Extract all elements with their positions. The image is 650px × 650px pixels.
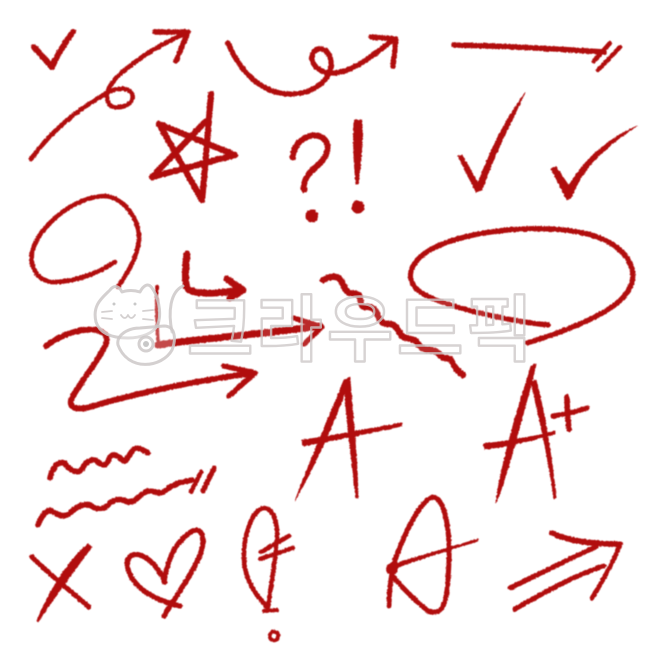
logo text: crowdpic: 크 bbox=[187, 291, 253, 371]
logo text: crowdpic: 픽 bbox=[466, 291, 532, 371]
arrow: smile curve with loop bbox=[228, 37, 396, 94]
icon: question mark bbox=[293, 135, 328, 222]
icon: leaf-shaped exclamation bbox=[244, 508, 293, 640]
icon: exclamation mark bbox=[352, 120, 364, 214]
line: short wave bbox=[50, 448, 148, 478]
arrow: Z-shaped arrow bbox=[46, 330, 255, 409]
shape: open circle left bbox=[32, 196, 139, 287]
letter mark: round A bbox=[386, 497, 478, 612]
watermark: crowdpic logo bbox=[95, 285, 532, 371]
icon: large check mark bbox=[458, 93, 525, 192]
icon: cat mascot with camera bbox=[95, 285, 183, 364]
icon: X mark bbox=[32, 544, 92, 622]
logo text: crowdpic: 우 bbox=[327, 291, 393, 371]
letter mark: A bbox=[295, 377, 402, 501]
line: zigzag wiggle bbox=[323, 277, 463, 375]
shape: speech ellipse bbox=[410, 229, 633, 343]
line: long wave with ticks bbox=[38, 468, 214, 525]
arrow: short bent arrow bbox=[186, 254, 243, 298]
icon: hand-drawn star bbox=[152, 94, 235, 200]
arrow: swoosh with loop bbox=[31, 32, 188, 159]
logo text: crowdpic: 라 bbox=[256, 291, 322, 371]
arrow: bent arrow behind logo bbox=[157, 287, 322, 345]
icon: heart bbox=[127, 530, 203, 616]
arrow: long line with double tick bbox=[454, 43, 620, 70]
logo text: crowdpic bbox=[187, 291, 532, 371]
arrow: double-line arrow bbox=[510, 533, 620, 609]
letter mark: A plus bbox=[483, 364, 587, 503]
icon: small check mark bbox=[34, 32, 73, 67]
logo text: crowdpic: 드 bbox=[397, 291, 463, 371]
icon: swoosh check mark bbox=[551, 126, 637, 200]
